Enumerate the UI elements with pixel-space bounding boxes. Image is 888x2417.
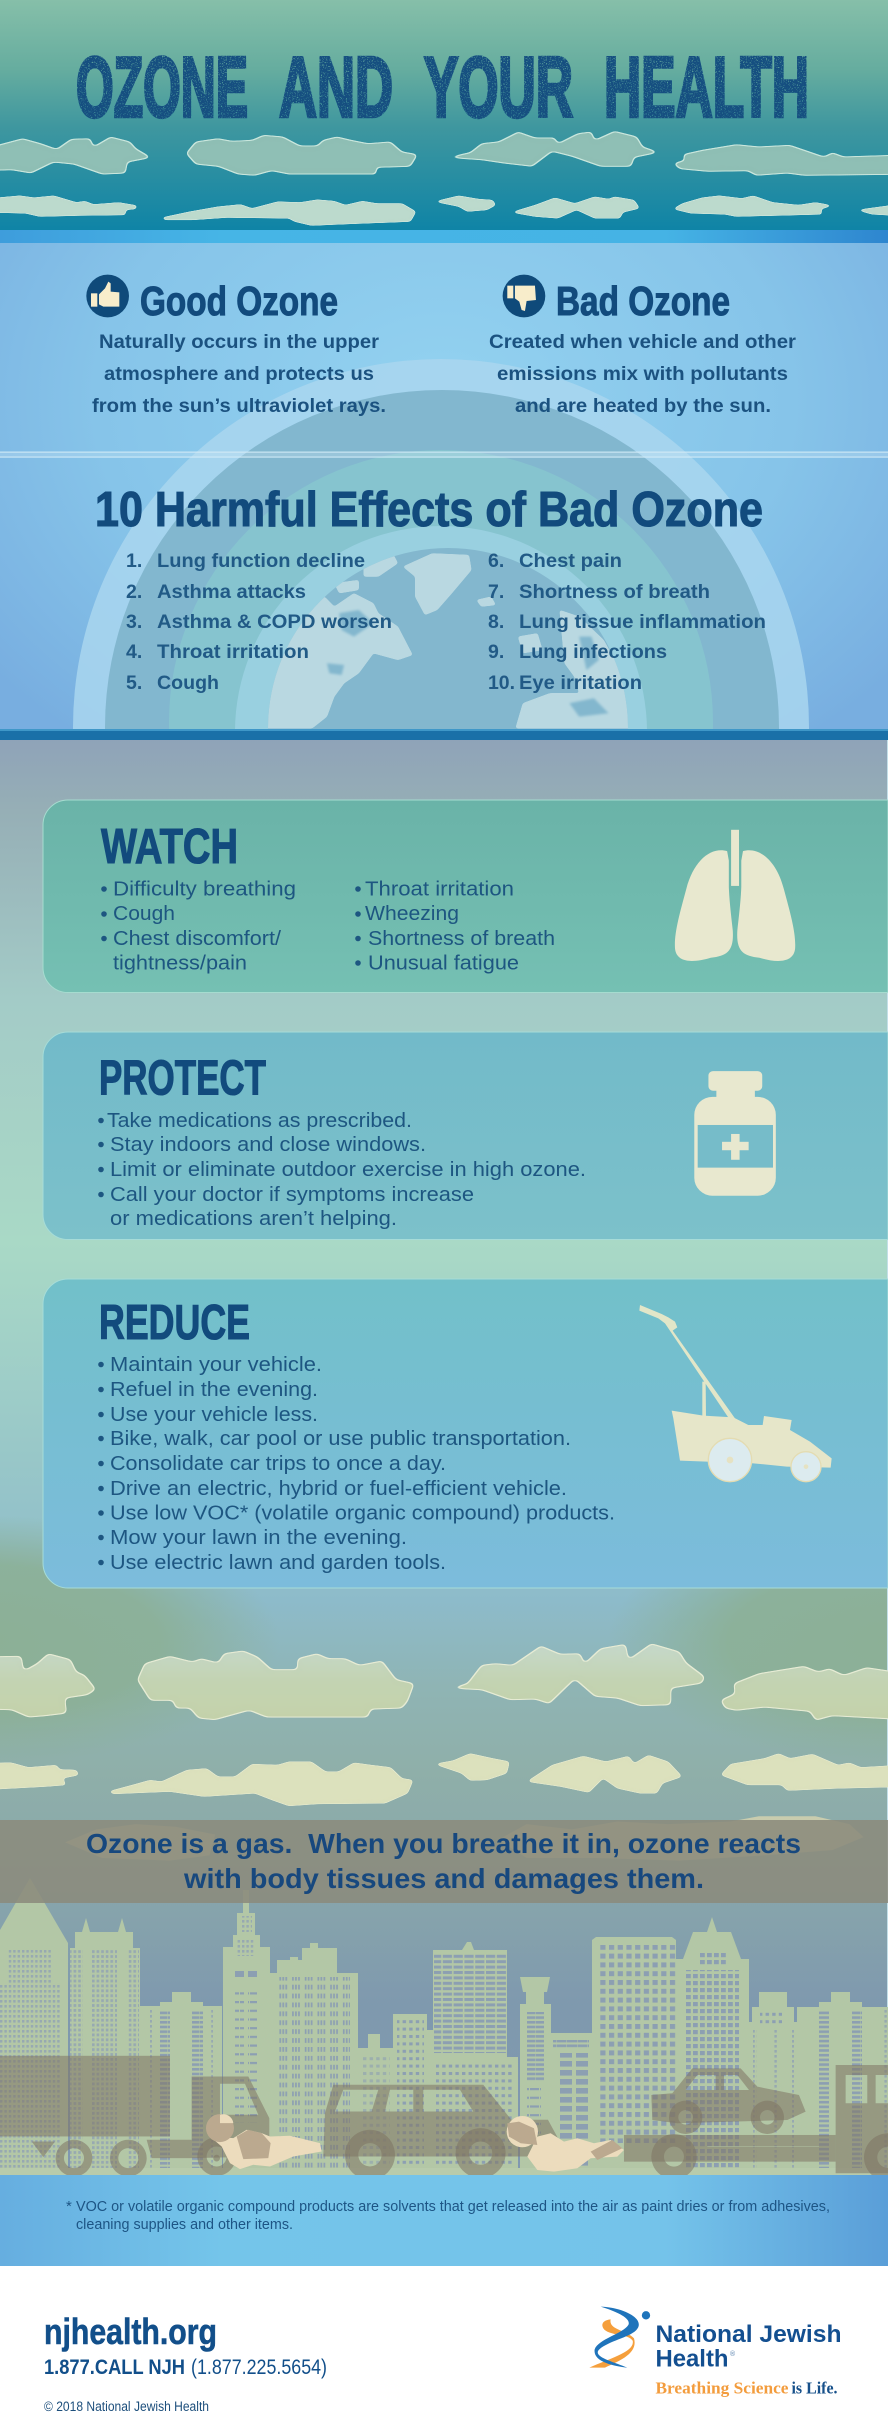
list: symptoms right: Shortness of breath bbox=[368, 928, 555, 950]
panel: protect bbox=[43, 1032, 888, 1240]
text: voc footnote: cleaning supplies and other items. bbox=[76, 2216, 293, 2233]
background: middle sky bbox=[0, 740, 888, 2175]
icon: lawn mower bbox=[639, 1305, 832, 1482]
title: AND bbox=[279, 40, 393, 136]
heading: reduce: REDUCE bbox=[99, 1296, 250, 1350]
text: bad ozone description bbox=[489, 331, 796, 417]
text: copyright: © 2018 National Jewish Health bbox=[44, 2399, 209, 2414]
title: OZONE bbox=[76, 40, 248, 136]
clouds: lower row two bbox=[0, 1753, 888, 1806]
footer bbox=[0, 2266, 888, 2417]
icon: thumbs up bbox=[86, 275, 129, 317]
text: organization name: Health bbox=[656, 2346, 728, 2372]
text: organization name: ® bbox=[730, 2350, 736, 2358]
text: good ozone description: Naturally occurs in the upper bbox=[99, 331, 379, 353]
text: bad ozone description: emissions mix with pollutants bbox=[497, 363, 788, 385]
list: effects 1 to 5: Lung function decline bbox=[157, 550, 365, 572]
text: voc footnote: * bbox=[66, 2198, 72, 2215]
list: reduce actions: Use electric lawn and garden tools. bbox=[110, 1552, 446, 1574]
clouds: lower row one bbox=[0, 1643, 888, 1721]
panel: reduce bbox=[43, 1279, 888, 1588]
vehicles in traffic bbox=[0, 2056, 888, 2181]
panel: title sky bbox=[0, 0, 888, 230]
list: effects 6 to 10: Chest pain bbox=[519, 550, 622, 572]
icon: lungs bbox=[675, 830, 795, 961]
text: organization name: National Jewish bbox=[656, 2321, 842, 2348]
list: effects 1 to 5: 1. bbox=[126, 550, 142, 572]
building: crown tower bbox=[676, 1917, 749, 2175]
text: phone: 1.877.CALL NJH bbox=[44, 2356, 185, 2379]
callout: ozone is a gas bbox=[0, 1816, 888, 1903]
building: control tower bbox=[520, 1977, 551, 2175]
list: symptoms left: Cough bbox=[113, 903, 175, 925]
text: phone: (1.877.225.5654) bbox=[191, 2356, 327, 2379]
building: stepped block bbox=[270, 1943, 358, 2175]
clouds: top row two bbox=[0, 196, 888, 226]
list: effects 6 to 10 bbox=[488, 550, 766, 694]
list: effects 6 to 10: 9. bbox=[488, 641, 504, 663]
block: bad ozone bbox=[489, 275, 796, 417]
logo: national jewish health bbox=[589, 2307, 842, 2398]
smoke left bbox=[206, 2114, 322, 2169]
text: bad ozone description: Created when vehicle and other bbox=[489, 331, 796, 353]
list: effects 1 to 5: Asthma & COPD worsen bbox=[157, 611, 392, 633]
list: reduce actions: Consolidate car trips to once a day. bbox=[110, 1453, 446, 1475]
list: symptoms right bbox=[355, 878, 555, 974]
atmosphere arcs and globe bbox=[73, 359, 809, 729]
title: YOUR bbox=[424, 40, 573, 136]
building: pointed tower bbox=[0, 1878, 68, 2175]
text: website: njhealth.org bbox=[44, 2311, 217, 2352]
list: protect actions: Limit or eliminate outdoor exercise in high ozone. bbox=[110, 1159, 586, 1181]
list: protect actions: Stay indoors and close windows. bbox=[110, 1134, 426, 1156]
panel: footnote bbox=[0, 2175, 888, 2266]
heading: 10 harmful effects: 10 Harmful Effects of Bad Ozone bbox=[95, 483, 763, 537]
text: good ozone description bbox=[92, 331, 386, 417]
buildings: small blocks bbox=[358, 2014, 433, 2175]
list: reduce actions: Use low VOC* (volatile organic compound) products. bbox=[110, 1502, 615, 1524]
panel: watch bbox=[43, 800, 888, 992]
buildings: right blocks bbox=[749, 1992, 888, 2175]
list: effects 6 to 10: Lung infections bbox=[519, 641, 667, 663]
text: voc footnote: VOC or volatile organic compound products are solvents that get released into the air as paint dries or from adhesives, bbox=[76, 2198, 830, 2215]
list: reduce actions: Maintain your vehicle. bbox=[110, 1354, 322, 1376]
text: tagline: is Life. bbox=[792, 2378, 838, 2398]
block: good ozone bbox=[86, 275, 386, 417]
list: symptoms left: Difficulty breathing bbox=[113, 878, 296, 900]
list: reduce actions: Use your vehicle less. bbox=[110, 1404, 318, 1426]
list: reduce actions: Mow your lawn in the evening. bbox=[110, 1527, 407, 1549]
heading: protect: PROTECT bbox=[99, 1052, 266, 1106]
list: effects 1 to 5: Throat irritation bbox=[157, 641, 309, 663]
list: effects 1 to 5: Cough bbox=[157, 672, 219, 694]
building: twin spires bbox=[70, 1918, 140, 2175]
text: organization name bbox=[656, 2321, 842, 2372]
list: effects 1 to 5 bbox=[126, 550, 392, 694]
list: reduce actions: Bike, walk, car pool or use public transportation. bbox=[110, 1428, 571, 1450]
text: ozone explanation bbox=[86, 1828, 801, 1894]
text: good ozone description: from the sun’s ultraviolet rays. bbox=[92, 395, 386, 417]
heading: watch: WATCH bbox=[101, 820, 238, 874]
building: antenna tower bbox=[223, 1890, 270, 2175]
list: protect actions: or medications aren’t helping. bbox=[110, 1208, 397, 1230]
city skyline bbox=[0, 1878, 888, 2175]
list: effects 6 to 10: Lung tissue inflammation bbox=[519, 611, 766, 633]
text: ozone explanation: with body tissues and damages them. bbox=[183, 1863, 704, 1894]
list: effects 1 to 5: 2. bbox=[126, 581, 142, 603]
text: tagline: Breathing Science bbox=[656, 2378, 789, 2398]
list: effects 6 to 10: 8. bbox=[488, 611, 504, 633]
icon: thumbs down bbox=[503, 275, 545, 317]
list: reduce actions bbox=[98, 1354, 615, 1574]
heading: good ozone: Good Ozone bbox=[140, 278, 338, 324]
list: symptoms right: Wheezing bbox=[365, 903, 459, 925]
list: effects 6 to 10: 7. bbox=[488, 581, 504, 603]
list: effects 1 to 5: 3. bbox=[126, 611, 142, 633]
list: symptoms left bbox=[101, 878, 296, 974]
list: effects 1 to 5: 5. bbox=[126, 672, 142, 694]
list: effects 6 to 10: 6. bbox=[488, 550, 504, 572]
list: symptoms right: Unusual fatigue bbox=[368, 952, 519, 974]
list: protect actions: Take medications as prescribed. bbox=[107, 1110, 412, 1132]
list: effects 1 to 5: Asthma attacks bbox=[157, 581, 306, 603]
building: low block bbox=[140, 1992, 222, 2175]
clouds: top row one bbox=[0, 131, 888, 176]
icon: helix bbox=[589, 2307, 650, 2368]
list: protect actions bbox=[98, 1110, 586, 1230]
jeep bbox=[323, 2085, 568, 2180]
truck left bbox=[0, 2056, 269, 2176]
smoke right bbox=[507, 2116, 624, 2172]
text: voc footnote bbox=[66, 2198, 830, 2233]
list: reduce actions: Refuel in the evening. bbox=[110, 1379, 318, 1401]
list: effects 6 to 10: 10. bbox=[488, 672, 515, 694]
list: symptoms left: tightness/pain bbox=[113, 952, 247, 974]
list: effects 6 to 10: Eye irritation bbox=[519, 672, 642, 694]
text: bad ozone description: and are heated by the sun. bbox=[515, 395, 771, 417]
heading: bad ozone: Bad Ozone bbox=[556, 278, 730, 324]
building: grid tower bbox=[592, 1937, 677, 2175]
panel: good and bad ozone with harmful effects bbox=[0, 230, 888, 740]
text: ozone explanation: Ozone is a gas. When you breathe it in, ozone reacts bbox=[86, 1828, 801, 1859]
list: effects 1 to 5: 4. bbox=[126, 641, 142, 663]
globe bbox=[268, 548, 628, 729]
list: reduce actions: Drive an electric, hybrid or fuel-efficient vehicle. bbox=[110, 1478, 567, 1500]
list: protect actions: Call your doctor if symptoms increase bbox=[110, 1184, 474, 1206]
text: good ozone description: atmosphere and protects us bbox=[104, 363, 374, 385]
list: effects 6 to 10: Shortness of breath bbox=[519, 581, 710, 603]
list: symptoms left: Chest discomfort/ bbox=[113, 928, 281, 950]
icon: medicine bottle bbox=[694, 1071, 776, 1196]
car on flatbed and tow truck bbox=[624, 2065, 888, 2181]
building: wide window block bbox=[551, 2033, 592, 2175]
list: symptoms right: Throat irritation bbox=[365, 878, 514, 900]
text: phone bbox=[44, 2356, 327, 2379]
title bbox=[76, 40, 809, 136]
building: bar windows bbox=[433, 1942, 518, 2175]
